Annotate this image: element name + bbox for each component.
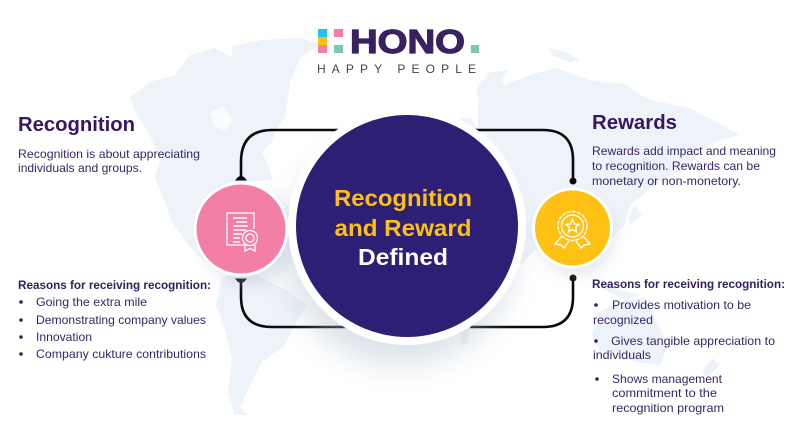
reasons heading: Reasons for receiving recognition: [592, 279, 785, 291]
reasons list: commitment to the [612, 386, 717, 400]
connector lines [236, 130, 576, 327]
logo [317, 23, 479, 76]
reasons list: Shows management [612, 372, 723, 386]
world map background [130, 38, 740, 415]
reasons list: Innovation [36, 330, 92, 344]
description: monetary or non-monetory. [592, 174, 741, 188]
reasons list: recognition program [612, 401, 724, 415]
reasons list [593, 298, 775, 415]
logo mark [318, 29, 343, 53]
description [18, 147, 200, 175]
reasons list: Company cukture contributions [36, 347, 206, 361]
icon: award rosette [555, 212, 590, 248]
central title: and Reward [334, 215, 472, 241]
central title [334, 185, 472, 270]
description: Rewards add impact and meaning [592, 144, 776, 158]
reasons list [19, 295, 206, 361]
soft shadows [203, 134, 615, 366]
pink icon circle [194, 182, 288, 276]
description: Recognition is about appreciating [18, 147, 200, 161]
panel: recognition [18, 114, 211, 361]
heading: Rewards [592, 112, 677, 134]
description [592, 144, 776, 188]
panel: rewards [592, 112, 785, 415]
reasons list: individuals [593, 348, 651, 362]
reasons heading: Reasons for receiving recognition: [18, 280, 211, 292]
reasons list: Demonstrating company values [36, 313, 206, 327]
logo tagline: HAPPY PEOPLE [317, 62, 476, 76]
logo wordmark: HONO [350, 23, 465, 60]
icon: certificate [227, 213, 258, 251]
yellow icon circle [532, 188, 613, 268]
description: individuals and groups. [18, 161, 142, 175]
reasons list: Provides motivation to be [612, 298, 751, 312]
central title: Defined [358, 244, 448, 270]
central circle [288, 107, 526, 345]
reasons list: recognized [593, 313, 653, 327]
description: to recognition. Rewards can be [592, 159, 760, 173]
reasons list: Going the extra mile [36, 295, 147, 309]
reasons list: Gives tangible appreciation to [611, 334, 775, 348]
central title: Recognition [334, 185, 472, 211]
heading: Recognition [18, 114, 135, 136]
